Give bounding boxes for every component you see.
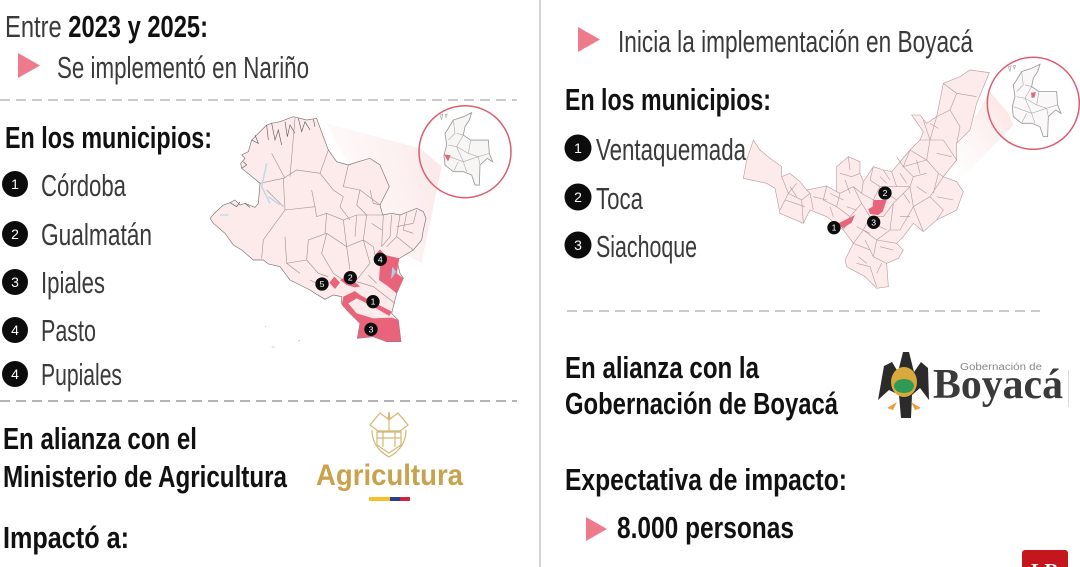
map: Nariño: 5: [320, 279, 325, 289]
item: Siachoque: [564, 229, 697, 264]
logo: Agricultura: [316, 412, 463, 501]
heading: alliance with ministry: En alianza con el: [3, 421, 197, 456]
item: Siachoque: 3: [574, 237, 582, 253]
item: Ventaquemada: 1: [574, 140, 582, 156]
map: Nariño: 4: [378, 254, 383, 264]
map: Nariño: 1: [371, 297, 376, 307]
heading: municipalities: En los municipios:: [565, 82, 771, 117]
map: Nariño: [210, 117, 442, 347]
item: Gualmatán: Gualmatán: [41, 217, 152, 252]
logo: Gobernación de Boyacá: Boyacá: [933, 362, 1063, 408]
item: Córdoba: 1: [11, 176, 19, 192]
logo: LR: [1022, 550, 1068, 567]
heading: period: Entre 2023 y 2025:: [5, 9, 208, 44]
item: Ipiales: 3: [11, 274, 19, 290]
map: Nariño: 3: [369, 324, 374, 334]
arrow: Boyacá: [578, 27, 600, 52]
item: Toca: Toca: [596, 181, 644, 216]
item: Siachoque: Siachoque: [596, 229, 697, 264]
arrow: people: [586, 517, 607, 541]
heading: alliance with ministry: [3, 421, 288, 494]
item: Ipiales: Ipiales: [41, 265, 105, 300]
heading: alliance with Gobernación: Gobernación de Boyacá: [565, 386, 839, 421]
map: Boyacá: 1: [832, 223, 837, 233]
item: Toca: [564, 181, 644, 216]
logo: Gobernación de Boyacá: [878, 352, 1069, 418]
map: Boyacá: 2: [883, 188, 888, 198]
logo: Agricultura: Agricultura: [316, 459, 463, 492]
heading: alliance with Gobernación: En alianza con la: [565, 350, 760, 385]
item: Ventaquemada: Ventaquemada: [596, 132, 747, 167]
text: 8.000 personas: 8.000 personas: [617, 510, 794, 545]
item: Gualmatán: [2, 217, 152, 252]
map: Boyacá: 3: [871, 217, 876, 227]
item: Córdoba: [2, 168, 127, 203]
item: Pasto: 4: [11, 322, 19, 338]
item: Gualmatán: 2: [11, 226, 19, 242]
logo: Gobernación de Boyacá: Gobernación de: [960, 362, 1042, 373]
heading: municipalities: En los municipios:: [5, 120, 212, 155]
item: Ventaquemada: [564, 132, 747, 167]
inset: Colombia locator, Boyacá: [987, 57, 1079, 149]
map: Boyacá: [743, 70, 1013, 288]
panel: Boyacá: [564, 24, 1079, 567]
item: Pupiales: [2, 357, 122, 392]
item: Pasto: [2, 313, 96, 348]
heading: alliance with ministry: Ministerio de Agricultura: [3, 459, 288, 494]
item: Toca: 2: [574, 189, 582, 205]
item: Córdoba: Córdoba: [41, 168, 127, 203]
arrow: Nariño: [18, 53, 40, 78]
heading: alliance with Gobernación: [565, 350, 839, 421]
item: Pupiales: 4: [11, 366, 19, 382]
item: Ipiales: [2, 265, 105, 300]
panel: Nariño: [2, 9, 511, 555]
item: Pupiales: Pupiales: [41, 357, 122, 392]
list: municipalities of Boyacá: [564, 132, 747, 264]
inset: Colombia locator, Nariño: [419, 106, 511, 198]
heading: expected impact: Expectativa de impacto:: [565, 462, 847, 497]
list: municipalities of Nariño: [2, 168, 152, 392]
item: Pasto: Pasto: [41, 313, 96, 348]
text: implemented in Nariño: Se implementó en Nariño: [57, 50, 309, 85]
map: Nariño: 2: [348, 273, 353, 283]
heading: impact: Impactó a:: [3, 520, 129, 555]
